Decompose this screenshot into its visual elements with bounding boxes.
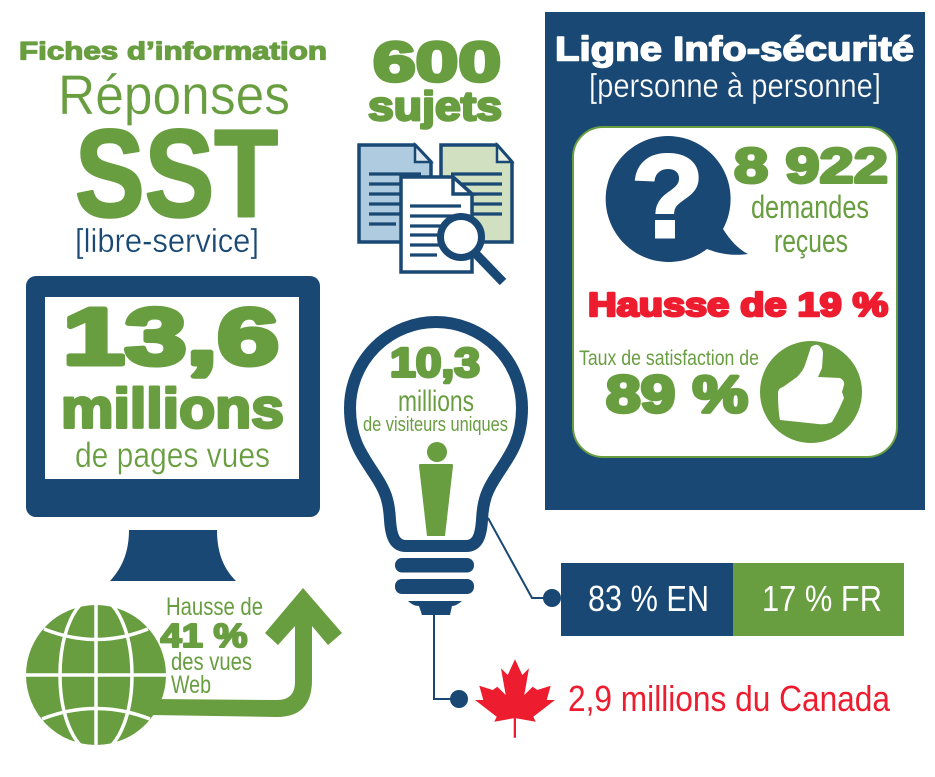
stat: 13,6 millions de pages vues: millions: [61, 376, 284, 440]
stat: 600 sujets: 600: [373, 30, 501, 93]
language split bar: [561, 563, 904, 636]
text: hausse de 41 % des vues Web: [160, 593, 263, 699]
stat: 8 922 demandes reçues: reçues: [774, 223, 848, 259]
inner white card: [573, 127, 897, 457]
heading: Fiches d'information: Fiches d’information: [19, 38, 327, 66]
heading: Réponses: Réponses: [58, 63, 290, 126]
connector: bulb to Canada: [434, 612, 459, 699]
stat: 10,3 millions de visiteurs uniques: [363, 340, 508, 436]
text: hausse de 41 % des vues Web: 41 %: [160, 617, 248, 654]
text: hausse de 41 % des vues Web: des vues: [171, 648, 252, 676]
stat: taux de satisfaction 89 %: [579, 347, 759, 424]
stat: 13,6 millions de pages vues: 13,6: [63, 292, 279, 381]
icon: question bubble: [606, 131, 748, 263]
heading: SST: SST: [75, 106, 278, 244]
icon: maple leaf: [475, 659, 555, 738]
text: hausse de 41 % des vues Web: Web: [171, 671, 211, 699]
icon: thumbs up: [760, 341, 862, 443]
icon: person: [419, 442, 453, 536]
stat: 13,6 millions de pages vues: de pages vues: [75, 436, 270, 475]
language split bar: 83 % EN: [588, 578, 709, 619]
stat: 8 922 demandes reçues: demandes: [751, 189, 869, 225]
text: hausse de 41 % des vues Web: Hausse de: [166, 593, 263, 621]
stat: 10,3 millions de visiteurs uniques: de visiteurs uniques: [363, 414, 508, 436]
panel: monitor: [26, 276, 320, 581]
icon: documents and magnifier: [359, 145, 512, 282]
icon: question bubble: ?: [631, 131, 704, 263]
stat: 10,3 millions de visiteurs uniques: 10,3: [390, 340, 480, 386]
panel heading: Ligne Info-sécurité: [555, 30, 914, 68]
icon: globe: [25, 597, 168, 753]
stat: 600 sujets: [368, 30, 502, 129]
connector dot: language bar: [543, 589, 561, 607]
connector: bulb to language bar: [488, 518, 552, 598]
icon: light bulb: [350, 322, 522, 615]
stat: 600 sujets: sujets: [368, 83, 502, 129]
stat: 13,6 millions de pages vues: [61, 292, 284, 475]
connector dot: Canada: [450, 690, 468, 708]
panel subheading: [personne à personne]: [589, 67, 881, 104]
stat: 8 922 demandes reçues: [734, 140, 888, 259]
language split bar: 17 % FR: [762, 578, 882, 619]
icon: upward arrow: [150, 588, 342, 717]
text: 2,9 millions du Canada: 2,9 millions du Canada: [568, 678, 891, 719]
stat: 8 922 demandes reçues: 8 922: [734, 140, 888, 194]
stat: taux de satisfaction 89 %: 89 %: [606, 366, 748, 424]
stat: Hausse de 19 %: Hausse de 19 %: [588, 286, 888, 323]
stat: taux de satisfaction 89 %: Taux de satisfaction de: [579, 347, 759, 370]
stat: 10,3 millions de visiteurs uniques: millions: [398, 385, 474, 418]
subheading: libre-service: [libre-service]: [75, 222, 259, 259]
panel: Ligne Info-sécurité: [545, 12, 925, 510]
